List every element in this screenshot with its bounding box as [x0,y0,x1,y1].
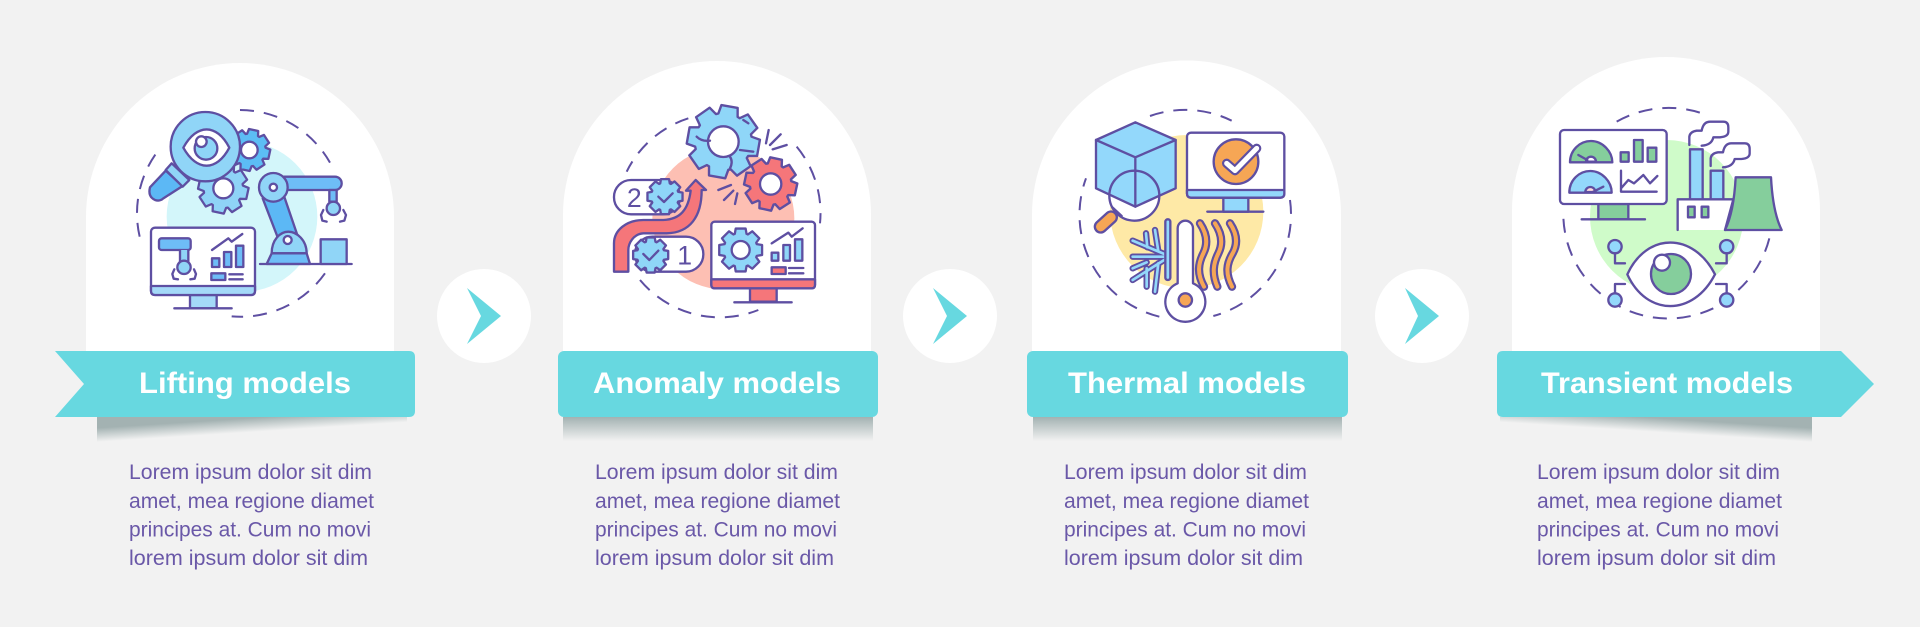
body text: principes at. Cum no movi [1537,518,1779,542]
body text: amet, mea regione diamet [1537,490,1782,513]
heading: Thermal models [1068,367,1306,400]
heading: Transient models [1541,367,1793,400]
body text: lorem ipsum dolor sit dim [129,547,368,570]
body text: Lorem ipsum dolor sit dim [1537,461,1780,484]
card background [563,61,871,355]
body text: principes at. Cum no movi [129,518,371,542]
icon: monitoring dashboard, factory and eye [1560,108,1782,318]
ribbon banner [558,351,878,417]
icon: gears and monitor [614,100,821,317]
body text: principes at. Cum no movi [1064,518,1306,542]
body text: Lorem ipsum dolor sit dim [1064,461,1307,484]
body text: Lorem ipsum dolor sit dim [129,461,372,484]
ribbon shadow [97,417,407,445]
ribbon banner [55,351,415,417]
icon: cube, thermometer and snowflake [1079,110,1291,322]
body text [1064,461,1309,570]
ribbon shadow [563,417,873,441]
card background [86,63,394,355]
body text: lorem ipsum dolor sit dim [1064,547,1303,570]
arrow 1 [437,269,531,363]
body text [1537,461,1782,570]
ribbon banner [1497,351,1874,417]
heading: Anomaly models [593,367,841,400]
heading: Lifting models [139,367,351,400]
panel: anomaly models [558,61,878,570]
ribbon banner [1027,351,1348,417]
panel: lifting models [55,63,415,570]
panel: transient models [1497,57,1874,570]
body text: principes at. Cum no movi [595,518,837,542]
card background [1032,61,1341,355]
body text: Lorem ipsum dolor sit dim [595,461,838,484]
icon: gears and monitor: 2 [627,183,642,213]
arrow 3 [1375,269,1469,363]
body text: lorem ipsum dolor sit dim [1537,547,1776,570]
icon: gears and monitor: 1 [677,241,692,271]
body text: lorem ipsum dolor sit dim [595,547,834,570]
panel: thermal models [1027,61,1348,570]
card background [1512,57,1820,355]
body text: amet, mea regione diamet [1064,490,1309,513]
body text: amet, mea regione diamet [595,490,840,513]
ribbon shadow [1500,417,1812,445]
arrow 2 [903,269,997,363]
icon: robotic arm inspection [137,110,352,317]
body text [129,461,374,570]
ribbon shadow [1033,417,1342,441]
body text [595,461,840,570]
body text: amet, mea regione diamet [129,490,374,513]
